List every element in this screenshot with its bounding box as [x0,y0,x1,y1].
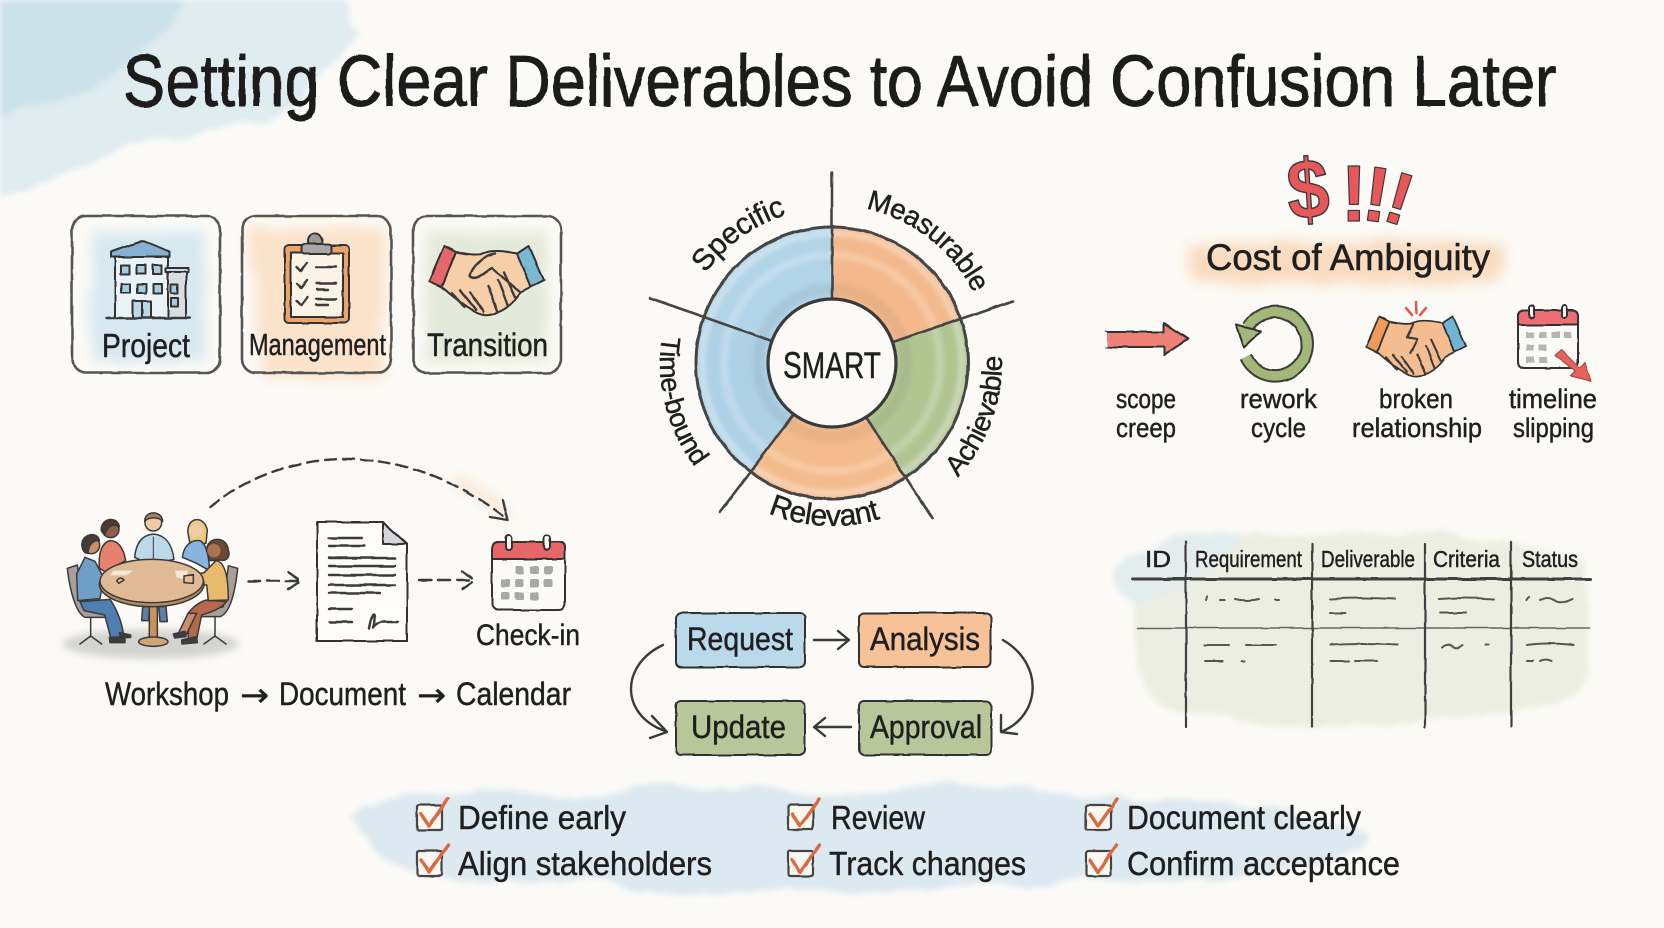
labels: cost items [1116,384,1597,443]
card: transition [413,216,561,373]
left chair [67,565,105,617]
label: workshop document calendar: Document [279,676,406,712]
checklist text [458,799,1400,882]
segment: relevant [750,414,906,499]
box: Approval [859,701,991,755]
panel: cost of ambiguity [1106,141,1597,443]
box: Update [676,701,805,755]
table headers: Status [1522,546,1578,572]
arrow: request to analysis [814,631,849,649]
hands and table sheets [110,571,188,579]
labels: cost items: broken [1379,384,1453,414]
icon: dollar and exclamation marks: ! [1341,149,1367,238]
label: Transition: Transition [427,327,548,363]
centre legs [142,607,167,622]
icon: broken sparks [1406,302,1426,315]
table placeholder scribbles [1205,597,1573,661]
labels: cost items: creep [1116,413,1176,443]
watercolor wash: top-left corner [0,0,360,200]
right chair [202,566,238,617]
pencil texture on wheel [702,233,962,493]
icon: check-in calendar [492,535,565,610]
labels: cost items: timeline [1509,384,1597,414]
icon: dollar and exclamation marks: $ [1284,141,1332,237]
label: Project: Project [102,327,190,364]
segment: measurable [832,227,961,342]
arrow: analysis to approval [1001,640,1033,734]
labels: cost items: slipping [1513,413,1594,443]
ground shadow [62,629,239,659]
label: Check-in: Check-in [476,619,580,652]
icon: building [107,241,190,318]
segment: time-bound [696,317,794,472]
labels: cost items: cycle [1251,413,1306,443]
labels: cost items: relationship [1352,413,1482,443]
chart: SMART wheel [648,171,1014,526]
icon: rework cycle [1236,312,1307,376]
icon: dollar and exclamation marks [1284,141,1423,242]
label: workshop document calendar: → [417,676,446,714]
table [149,606,157,637]
label: SMART: SMART [783,345,881,386]
card: management [242,216,391,378]
label: workshop document calendar [105,676,571,714]
table headers [1145,546,1578,572]
labels: cost items: scope [1116,384,1176,414]
label: workshop document calendar: Workshop [105,676,229,712]
wheel outlines and dividers [650,172,1013,518]
heading: Cost of Ambiguity: Cost of Ambiguity [1206,237,1490,278]
table headers: ID [1145,546,1171,572]
segment: specific [704,227,832,342]
box: Approval: Approval [870,709,982,745]
label: Management: Management [249,327,386,362]
person: centre man [135,534,174,563]
checkboxes [417,799,1117,876]
arrow: update to request loop [631,645,667,738]
icon: scope creep arrow [1106,323,1188,355]
box: Update: Update [691,709,786,745]
checklist text: Confirm acceptance [1127,845,1400,882]
box: Analysis: Analysis [870,621,980,657]
label: workshop document calendar: Calendar [456,676,571,712]
box: Request: Request [687,621,793,657]
checklist wash [352,786,1370,895]
icon: broken handshake [1366,316,1466,377]
table headers: Requirement [1195,546,1302,572]
icon: clipboard [285,234,349,323]
label: workshop document calendar: → [240,676,269,714]
card: project [72,216,220,373]
arrow: document to calendar [419,571,475,589]
panel: checklist [352,786,1400,895]
icon: slipping calendar [1518,305,1591,381]
box: Analysis [859,613,991,667]
table headers: Criteria [1433,546,1500,572]
panel: project, management, transition cards [72,216,561,378]
checklist text: Document clearly [1127,799,1361,836]
checklist text: Define early [458,799,626,836]
box: Request [676,613,805,667]
panel: workshop to calendar flow [62,459,580,714]
checklist text: Align stakeholders [458,845,712,882]
person: right woman [188,600,227,639]
label: Specific: Specific [692,200,784,270]
arrow: curved dashed to calendar [210,459,508,520]
arrow: approval to update [814,718,851,736]
person: blonde woman [188,520,207,543]
panel: requirements table [1115,533,1591,729]
icon: handshake [429,246,544,315]
icon: dollar and exclamation marks: ! [1376,155,1423,242]
label: Relevant: Relevant [770,494,880,526]
icon: document [317,522,407,641]
labels: cost items: rework [1240,384,1317,414]
checklist text: Review [831,799,925,836]
label: Time-bound: Time-bound [660,338,710,466]
icon: dollar and exclamation marks: ! [1358,149,1396,240]
panel: request cycle flow [631,613,1033,755]
arrow: workshop to document [248,572,301,590]
label: Measurable: Measurable [868,190,985,290]
person: left man [80,599,124,637]
table wash [1115,533,1591,729]
illustration: team at table [62,513,239,659]
heading wash [1188,241,1506,285]
checklist text: Track changes [829,845,1026,882]
table grid [1133,542,1590,727]
label: Achievable: Achievable [948,356,1002,478]
wheel centre [768,299,896,427]
table headers: Deliverable [1321,546,1415,572]
person: dark hair woman [99,541,126,572]
segment: achievable [867,319,968,477]
